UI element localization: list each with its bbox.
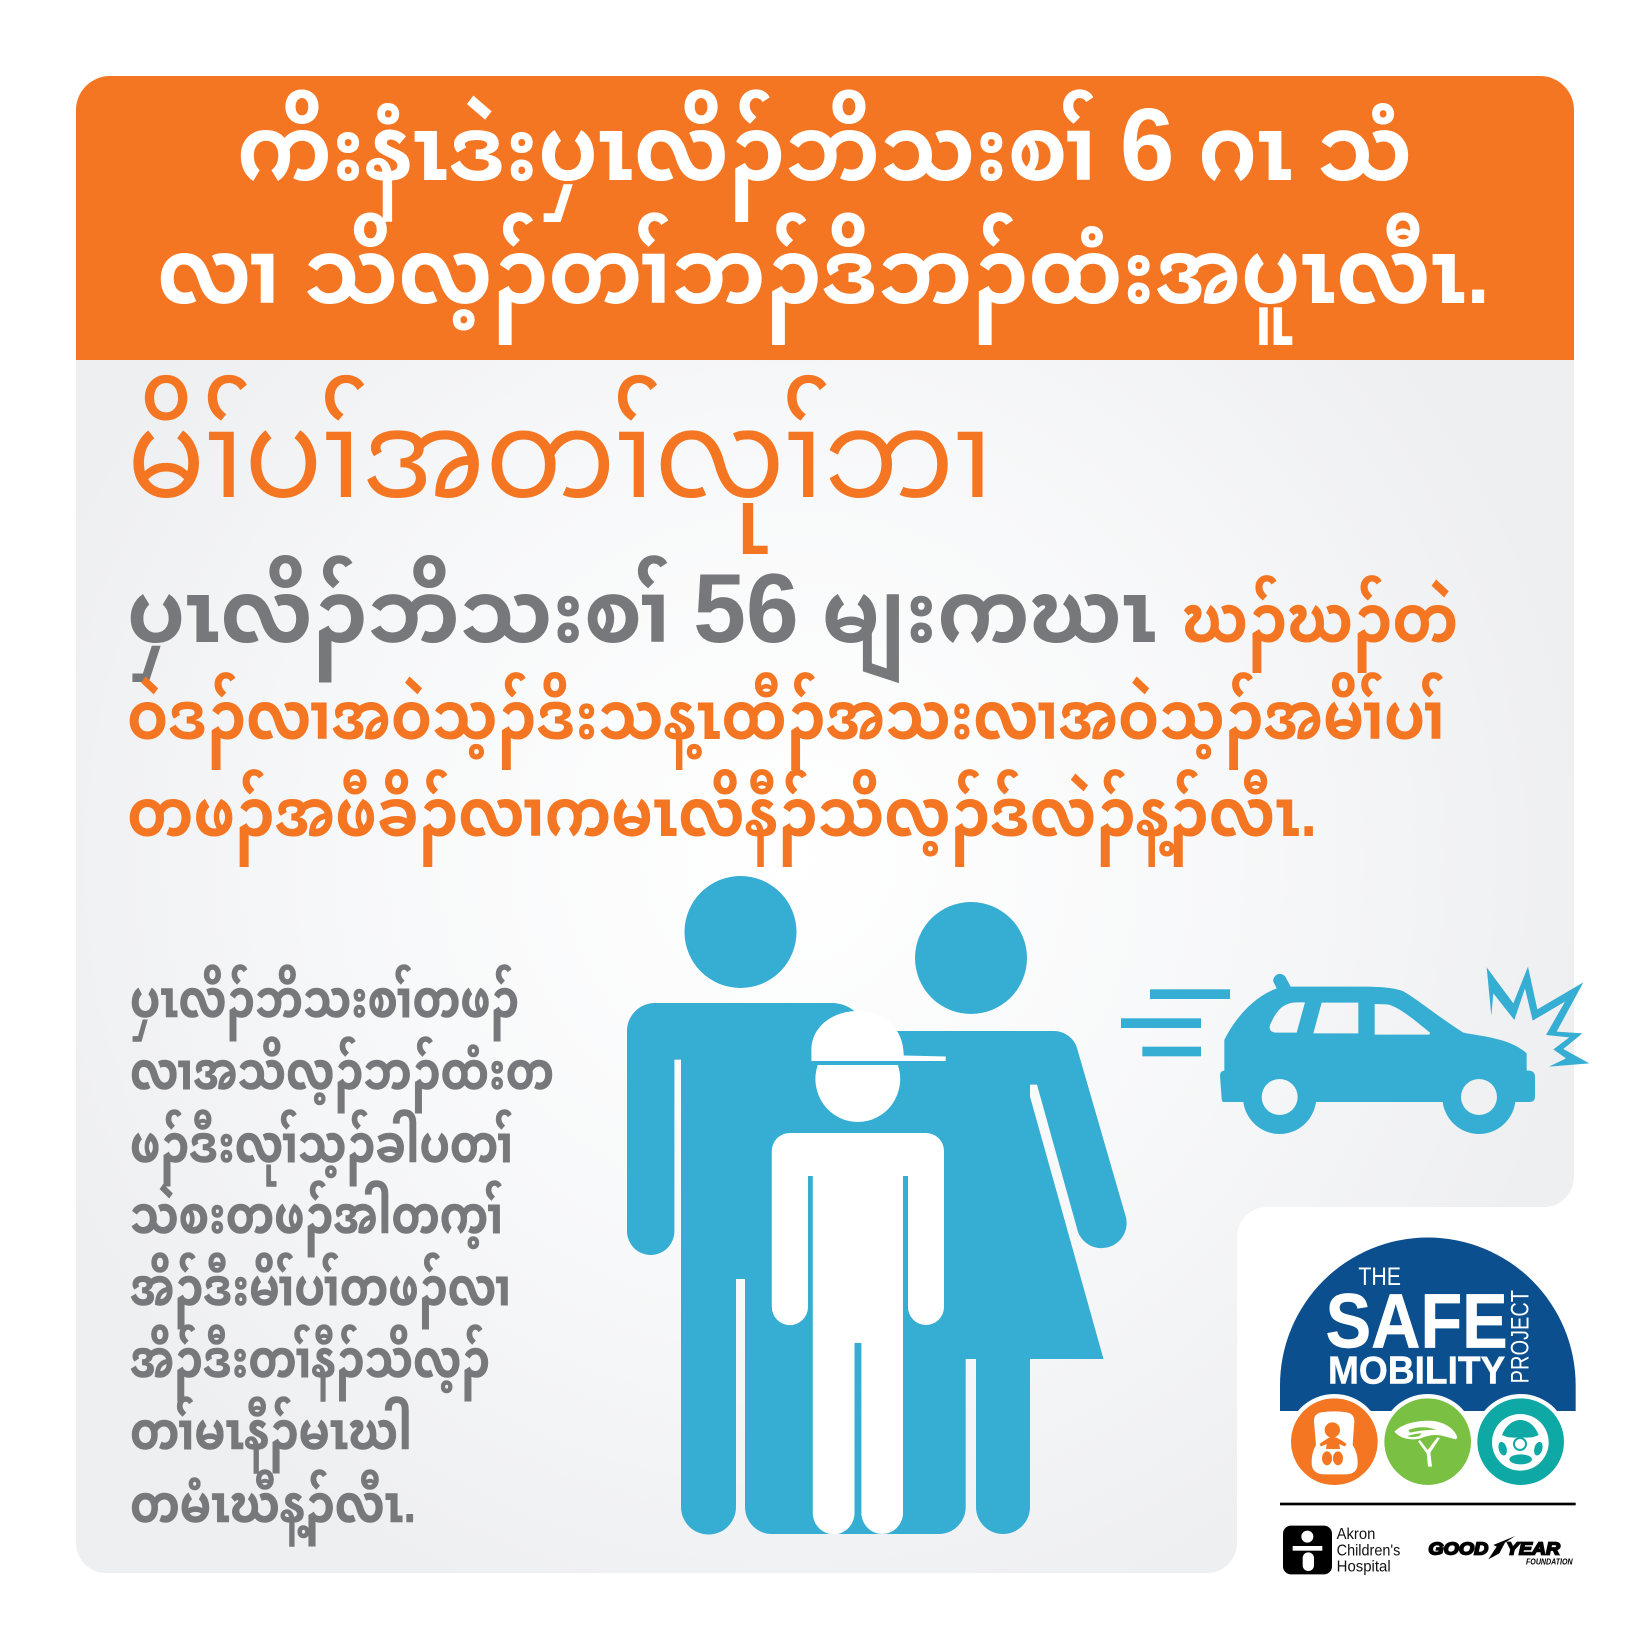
text block: left paragraph: တမံၤဃီန့ၣ်လီၤ. xyxy=(130,1469,416,1546)
logo: Goodyear Foundation xyxy=(1428,1536,1573,1566)
logo: Goodyear Foundation: FOUNDATION xyxy=(1526,1556,1573,1566)
text block: statistic: ပှၤလိၣ်ဘိသးစၢ် 56 မျးကဃၤ xyxy=(127,553,1157,684)
text block: left paragraph: ပှၤလိၣ်ဘိသးစၢ်တဖၣ် xyxy=(130,964,519,1041)
text block: left paragraph: အိၣ်ဒီးမိၢ်ပၢ်တဖၣ်လၢ xyxy=(130,1252,511,1329)
text block: statistic xyxy=(127,553,1458,867)
text block: left paragraph: သဲစးတဖၣ်အါတက့ၢ် xyxy=(130,1180,503,1257)
logo: child seat badge xyxy=(1287,1394,1382,1489)
icon: crash burst xyxy=(1487,967,1589,1067)
logo: wordmark: MOBILITY xyxy=(1328,1349,1506,1392)
heading: parents' role: မိၢ်ပၢ်အတၢ်လုၢ်ဘၢ xyxy=(127,373,993,554)
icon: man xyxy=(627,876,885,1535)
logo: Akron Children's Hospital: Children's xyxy=(1337,1542,1400,1559)
text block: left paragraph: ဖၣ်ဒီးလုၢ်သ့ၣ်ခါပတၢ် xyxy=(130,1109,513,1186)
icon: family of three xyxy=(627,876,1127,1535)
logo: Akron Children's Hospital: Akron xyxy=(1337,1526,1375,1543)
text block: statistic: ဝဲဒၣ်လၢအဝဲသ့ၣ်ဒိးသန့ၤထီၣ်အသးလၢအဝဲသ့ၣ်အမိၢ်ပၢ် xyxy=(127,671,1445,770)
logo: blue dome xyxy=(1280,1237,1576,1411)
icon: car xyxy=(1220,974,1535,1134)
text block: left paragraph: အိၣ်ဒီးတၢ်နီၣ်သိလ့ၣ် xyxy=(130,1324,490,1401)
title: လၢ သိလ့ၣ်တၢ်ဘၣ်ဒိဘၣ်ထံးအပူၤလီၤ. xyxy=(157,212,1490,345)
logo: steering wheel badge xyxy=(1473,1394,1568,1489)
logo: wordmark: SAFE xyxy=(1326,1278,1508,1364)
panel: orange header xyxy=(76,76,1574,360)
logo: wordmark: THE xyxy=(1358,1263,1401,1291)
icon: woman xyxy=(850,902,1127,1534)
divider rule xyxy=(1280,1503,1576,1505)
logo: Goodyear Foundation: GOOD xyxy=(1428,1538,1488,1558)
logo: Akron Children's Hospital xyxy=(1283,1526,1400,1576)
title: ကိးနံၤဒဲးပှၤလိၣ်ဘိသးစၢ် 6 ဂၤ သံ xyxy=(237,87,1412,222)
icon: speed lines xyxy=(1121,989,1230,1056)
logo: Goodyear Foundation: YEAR xyxy=(1506,1538,1560,1558)
text block: left paragraph: တၢ်မၤနီၣ်မၤဃါ xyxy=(130,1396,412,1473)
text block: left paragraph: လၢအသိလ့ၣ်ဘၣ်ထံးတ xyxy=(130,1036,554,1113)
text block: statistic: ဃၣ်ဃၣ်တဲ xyxy=(1182,574,1458,673)
logo: Akron Children's Hospital: Hospital xyxy=(1337,1559,1391,1576)
text block: statistic: တဖၣ်အဖီခိၣ်လၢကမၤလိနီၣ်သိလ့ၣ်ဒ်လဲၣ်န့ၣ်လီၤ. xyxy=(127,768,1317,867)
panel: grey background xyxy=(76,360,1574,1573)
icon: speeding car crash xyxy=(1121,967,1589,1134)
icon: child xyxy=(772,1011,946,1534)
logo: Safe Mobility Project xyxy=(1280,1237,1576,1576)
title xyxy=(157,87,1490,345)
logo: wordmark xyxy=(1326,1263,1534,1392)
text block: left paragraph xyxy=(130,964,554,1546)
logo: helmet badge xyxy=(1380,1394,1475,1489)
logo: wordmark: PROJECT xyxy=(1506,1290,1534,1383)
